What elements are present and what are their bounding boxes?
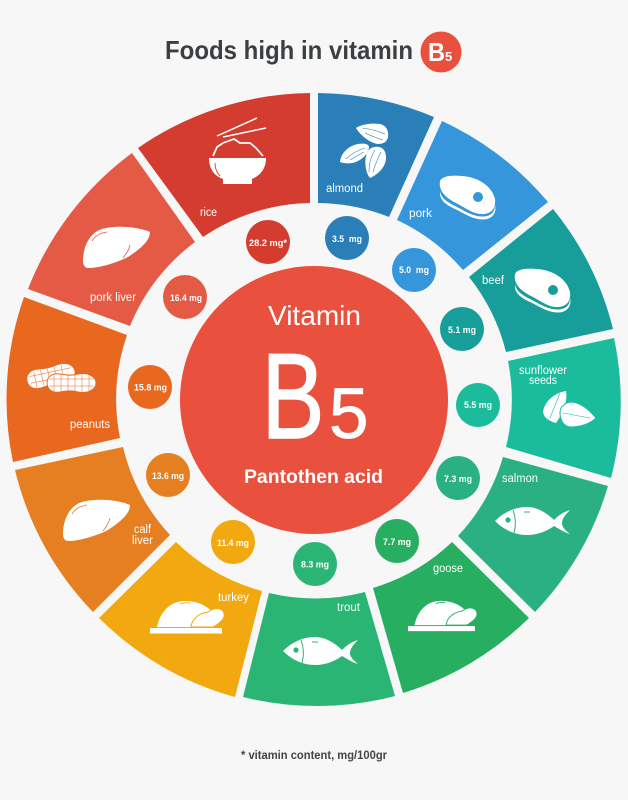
title	[165, 32, 462, 72]
bubble: rice 28.2 mg	[246, 220, 290, 264]
bubble: sunflower seeds 5.5 mg: 5.5 mg	[464, 400, 492, 411]
bubble: pork liver 16.4 mg: 16.4 mg	[170, 293, 202, 304]
bubble: trout 8.3 mg	[293, 542, 337, 586]
label: turkey: turkey	[218, 592, 249, 604]
center subtitle: Pantothen acid: Pantothen acid	[244, 466, 383, 488]
panel: pork liver	[28, 153, 195, 326]
label: almond: almond	[326, 183, 363, 195]
segment: beef	[469, 209, 613, 352]
icon: goose	[408, 601, 477, 631]
segment: calf liver	[15, 447, 170, 612]
bubble: goose 7.7 mg	[375, 519, 419, 563]
bubble: pork 5.0 mg: 5.0 mg	[399, 265, 429, 276]
title badge: B5: 5	[445, 49, 452, 64]
icon: peanuts	[26, 362, 96, 393]
label: trout: trout	[337, 602, 361, 614]
bubble: peanuts 15.8 mg	[128, 365, 172, 409]
center symbol: B: B	[262, 328, 324, 464]
panel: peanuts	[7, 297, 127, 462]
panel: goose	[373, 542, 529, 693]
panel: pork	[397, 121, 548, 270]
label: goose: goose	[433, 563, 463, 575]
label: pork liver: pork liver	[90, 292, 136, 304]
panel: trout	[243, 592, 395, 706]
central circle: vitamin B5	[180, 266, 448, 534]
segment: peanuts	[7, 297, 127, 462]
title text: Foods high in vitamin	[165, 35, 413, 65]
icon: turkey	[150, 601, 224, 634]
center heading: Vitamin: Vitamin	[268, 300, 361, 331]
panel: calf liver	[15, 447, 170, 612]
label: beef: beef	[482, 275, 505, 287]
bubble: turkey 11.4 mg	[211, 520, 255, 564]
segment: sunflower seeds	[506, 338, 621, 478]
title badge: B5	[420, 32, 462, 72]
label: pork: pork	[409, 208, 432, 220]
panel: rice	[138, 93, 310, 237]
bubble: beef 5.1 mg	[440, 307, 484, 351]
label: calf liver: liver	[132, 535, 153, 547]
bubble: trout 8.3 mg: 8.3 mg	[301, 560, 329, 570]
segment: rice	[138, 93, 310, 237]
bubble: pork 5.0 mg	[392, 248, 436, 292]
segment: pork liver	[28, 153, 195, 326]
bubble: beef 5.1 mg: 5.1 mg	[448, 325, 476, 336]
label: calf liver: calf	[134, 524, 152, 536]
segment: goose	[373, 542, 529, 693]
icon: beef steak	[515, 269, 570, 312]
bubble: calf liver 13.6 mg: 13.6 mg	[152, 471, 184, 482]
icon: rice bowl	[209, 118, 266, 184]
panel: sunflower seeds	[506, 338, 621, 478]
bubble: salmon 7.3 mg: 7.3 mg	[444, 474, 472, 485]
icon: calf liver	[63, 500, 130, 541]
bubble: almond 3.5 mg	[325, 216, 369, 260]
label: peanuts: peanuts	[70, 419, 110, 431]
panel: beef	[469, 209, 613, 352]
icon: pork liver	[83, 227, 150, 268]
segment: turkey	[99, 542, 262, 697]
bubble: turkey 11.4 mg: 11.4 mg	[217, 538, 249, 549]
icon: almonds	[340, 124, 388, 178]
panel: turkey	[99, 542, 262, 697]
bubble: peanuts 15.8 mg: 15.8 mg	[134, 382, 167, 394]
bubble: salmon 7.3 mg	[436, 456, 480, 500]
icon: trout fish	[283, 637, 358, 665]
icon: salmon fish	[495, 507, 570, 535]
label: sunflower seeds	[519, 365, 567, 387]
bubble: pork liver 16.4 mg	[163, 275, 207, 319]
segment: trout	[243, 592, 395, 706]
label: calf liver	[132, 524, 153, 547]
center symbol: 5: 5	[329, 375, 368, 454]
icon: sunflower seeds	[543, 391, 596, 427]
bubble: almond 3.5 mg: 3.5 mg	[332, 234, 362, 245]
segment: salmon	[458, 457, 608, 612]
bubble: calf liver 13.6 mg	[146, 453, 190, 497]
label: sunflower seeds: sunflower	[519, 365, 567, 377]
panel: salmon	[458, 457, 608, 612]
label: rice: rice	[200, 207, 217, 219]
segment: pork	[397, 121, 548, 270]
bubble: sunflower seeds 5.5 mg	[456, 383, 500, 427]
bubble: goose 7.7 mg: 7.7 mg	[383, 537, 411, 548]
icon: pork steak	[440, 176, 495, 220]
panel: almond	[318, 93, 434, 217]
title badge: B5: B	[428, 37, 445, 67]
label: sunflower seeds: seeds	[529, 375, 557, 387]
bubble: rice 28.2 mg: 28.2 mg*	[249, 238, 287, 249]
label: salmon: salmon	[502, 473, 538, 485]
segment: almond	[318, 93, 434, 217]
footnote: * vitamin content, mg/100gr	[241, 748, 387, 762]
